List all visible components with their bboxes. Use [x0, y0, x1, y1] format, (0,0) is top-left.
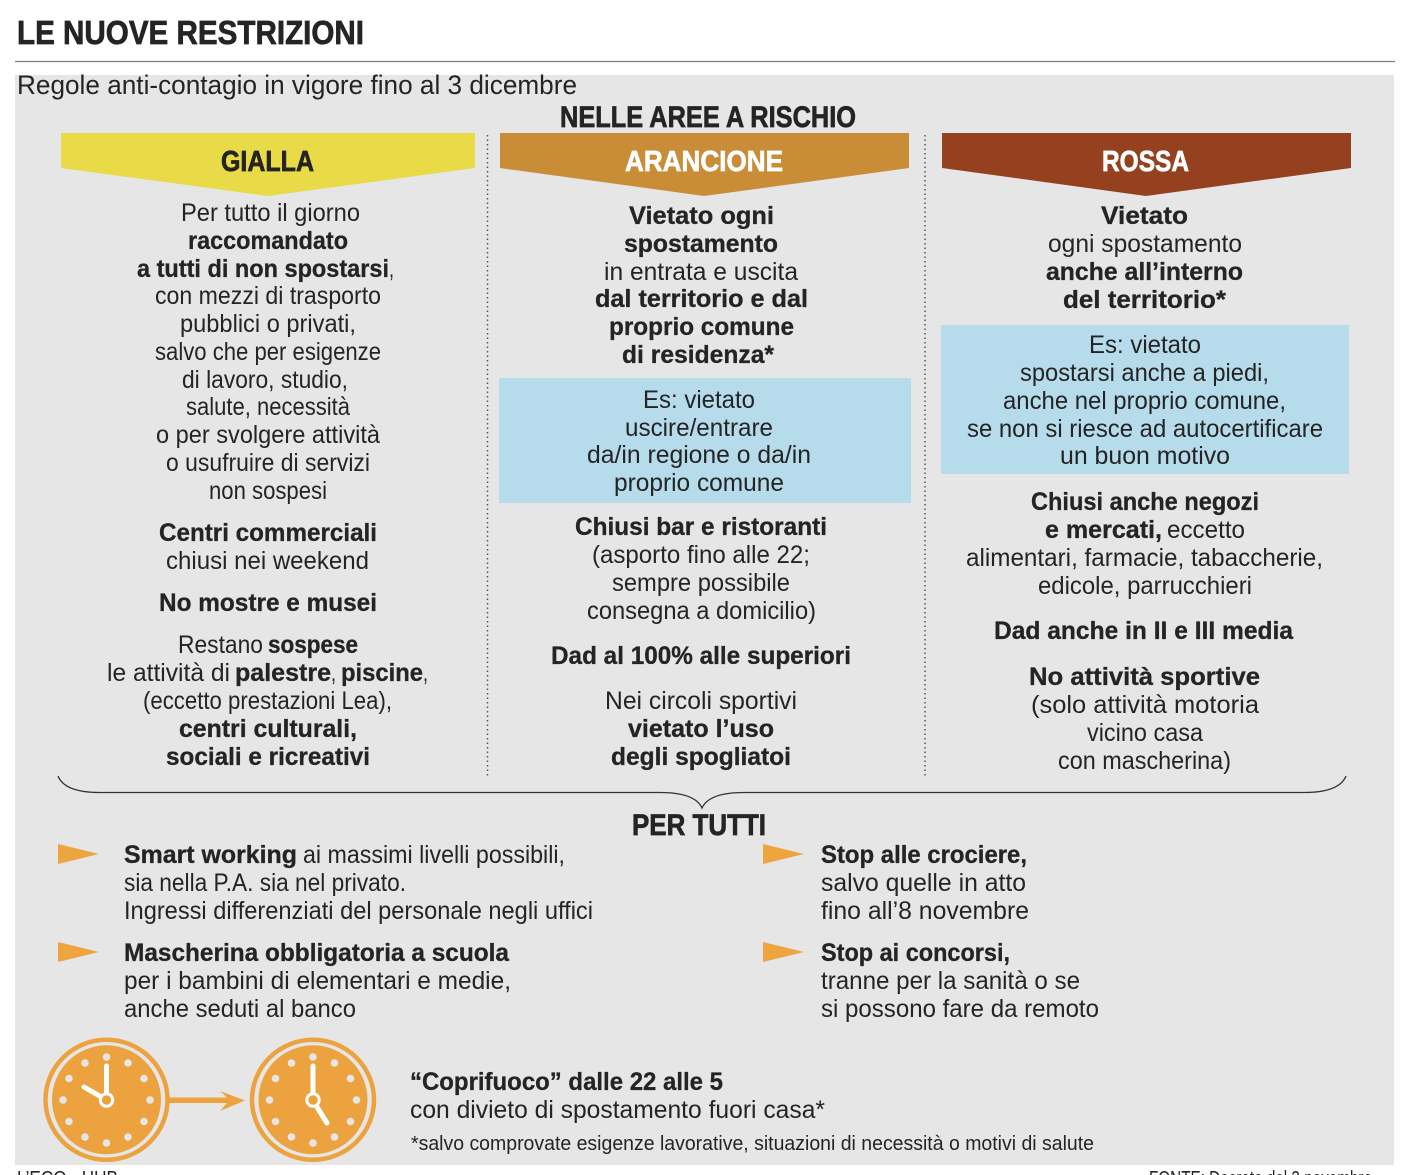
text block: chiusi bar e ristoranti: consegna a domicilio) — [587, 597, 816, 625]
text block: centri commerciali: chiusi nei weekend — [166, 547, 369, 575]
icon: clock 5 — [252, 1040, 374, 1160]
text block: chiusi negozi: edicole, parrucchieri — [1038, 572, 1252, 600]
icon: arrow mascherina — [58, 942, 99, 962]
banner: rossa: ROSSA — [1102, 146, 1189, 178]
icon: arrow smart working — [58, 844, 99, 864]
footnote: *salvo comprovate esigenze lavorative, situazioni di necessità o motivi di salute — [411, 1133, 1094, 1155]
text block: vietato ogni spostamento: proprio comune — [609, 313, 794, 341]
text block: no attività sportive: No attività sportive — [1029, 663, 1260, 691]
text block: smart working: Ingressi differenziati del personale negli uffici — [124, 897, 593, 925]
text block: per tutto il giorno: salvo che per esigenze — [155, 338, 381, 366]
banner: arancione — [500, 133, 909, 196]
subtitle: Regole anti-contagio in vigore fino al 3 dicembre — [17, 70, 577, 100]
text block: smart working: ai massimi livelli possibili, — [303, 841, 565, 869]
text block: attività sospese: , — [423, 659, 428, 687]
text block: vietato ogni spostamento: in entrata e uscita — [604, 258, 798, 286]
text block: chiusi bar e ristoranti: (asporto fino alle 22; — [592, 541, 810, 569]
text block: smart working: Smart working — [124, 841, 297, 869]
text block: per tutto il giorno: pubblici o privati, — [180, 310, 356, 338]
text block: vietato ogni spostamento: Vietato ogni — [629, 202, 774, 230]
text block: per tutto il giorno: Per tutto il giorno — [181, 199, 360, 227]
text block: crociere: Stop alle crociere, — [821, 841, 1027, 869]
text block: coprifuoco: “Coprifuoco” dalle 22 alle 5 — [410, 1068, 723, 1096]
icon: clock 22 — [46, 1040, 168, 1160]
text block: smart working — [124, 841, 593, 925]
text block: coprifuoco — [410, 1068, 825, 1124]
callout: esempio arancione: da/in regione o da/in — [587, 441, 811, 469]
text block: concorsi — [821, 939, 1099, 1023]
text block: no attività sportive — [1029, 663, 1260, 775]
text block: per tutto il giorno: , — [389, 255, 394, 283]
callout: esempio rossa: un buon motivo — [1060, 442, 1230, 470]
icon: arrow crociere — [763, 844, 804, 864]
text block: concorsi: si possono fare da remoto — [821, 995, 1099, 1023]
text block: vietato ogni spostamento: spostamento — [624, 230, 778, 258]
text block: chiusi negozi: alimentari, farmacie, tabaccherie, — [966, 544, 1323, 572]
callout: esempio arancione — [499, 378, 911, 503]
callout: esempio rossa: spostarsi anche a piedi, — [1020, 359, 1269, 387]
text block: attività sospese: centri culturali, — [179, 715, 357, 743]
text block: per tutto il giorno: non sospesi — [209, 477, 327, 505]
banner: rossa — [942, 133, 1351, 196]
text block: circoli sportivi — [605, 687, 797, 771]
callout: esempio arancione: proprio comune — [614, 469, 784, 497]
text block: mascherina — [124, 939, 511, 1023]
text block: smart working: sia nella P.A. sia nel privato. — [124, 869, 406, 897]
text block: per tutto il giorno: a tutti di non spostarsi — [137, 255, 389, 283]
callout: esempio rossa: se non si riesce ad autocertificare — [967, 415, 1323, 443]
heading: per tutti: PER TUTTI — [632, 809, 766, 842]
text block: dad superiori: Dad al 100% alle superiori — [551, 642, 851, 670]
text block: per tutto il giorno: di lavoro, studio, — [182, 366, 348, 394]
callout: esempio arancione: Es: vietato — [643, 386, 755, 414]
text block: vietato spostamento: ogni spostamento — [1048, 230, 1242, 258]
column: arancione rules — [499, 202, 911, 771]
arrow: between clocks — [169, 1091, 245, 1111]
text block: per tutto il giorno: o usufruire di servizi — [166, 449, 370, 477]
text block: per tutto il giorno: salute, necessità — [186, 393, 350, 421]
text block: dad media: Dad anche in II e III media — [994, 617, 1294, 645]
text block: chiusi negozi: e mercati, — [1045, 516, 1162, 544]
text block: vietato spostamento — [1046, 202, 1243, 314]
title: LE NUOVE RESTRIZIONI — [17, 14, 364, 51]
text block: chiusi negozi — [966, 488, 1323, 600]
text block: attività sospese: sospese — [268, 631, 358, 659]
text block: concorsi: tranne per la sanità o se — [821, 967, 1080, 995]
text block: no attività sportive: con mascherina) — [1058, 747, 1231, 775]
text block: per tutto il giorno: o per svolgere attività — [156, 421, 380, 449]
callout: esempio rossa: anche nel proprio comune, — [1003, 387, 1286, 415]
text block: concorsi: Stop ai concorsi, — [821, 939, 1010, 967]
text block: per tutto il giorno: con mezzi di trasporto — [155, 282, 381, 310]
text block: circoli sportivi: Nei circoli sportivi — [605, 687, 797, 715]
text block: chiusi bar e ristoranti: Chiusi bar e ristoranti — [575, 513, 827, 541]
text block: attività sospese: Restano — [178, 631, 263, 659]
callout: esempio rossa: Es: vietato — [1089, 331, 1201, 359]
text block: no attività sportive: (solo attività motoria — [1031, 691, 1259, 719]
text block: circoli sportivi: vietato l’uso — [628, 715, 774, 743]
text block: attività sospese: sociali e ricreativi — [166, 743, 370, 771]
text block: attività sospese: , — [331, 659, 336, 687]
text block: crociere — [821, 841, 1029, 925]
text block: per tutto il giorno — [137, 199, 394, 505]
callout: esempio arancione: uscire/entrare — [625, 414, 773, 442]
text block: attività sospese: piscine — [341, 659, 423, 687]
text block: mascherina: per i bambini di elementari e medie, — [124, 967, 511, 995]
text block: no mostre e musei: No mostre e musei — [159, 589, 377, 617]
banner: arancione: ARANCIONE — [625, 146, 783, 178]
column: rossa rules — [941, 202, 1349, 775]
text block: attività sospese: (eccetto prestazioni Lea), — [143, 687, 392, 715]
text block: crociere: fino all’8 novembre — [821, 897, 1029, 925]
text block: chiusi negozi: eccetto — [1167, 516, 1245, 544]
text block: chiusi negozi: Chiusi anche negozi — [1031, 488, 1259, 516]
text block: vietato spostamento: Vietato — [1101, 202, 1188, 230]
text block: vietato ogni spostamento: dal territorio e dal — [595, 285, 808, 313]
text block: chiusi bar e ristoranti: sempre possibile — [612, 569, 790, 597]
text block: attività sospese: le attività di — [107, 659, 230, 687]
text block: attività sospese — [107, 631, 428, 771]
callout: esempio rossa — [941, 325, 1349, 474]
text block: mascherina: Mascherina obbligatoria a scuola — [124, 939, 510, 967]
text block: per tutto il giorno: raccomandato — [188, 227, 348, 255]
text block: attività sospese: palestre — [235, 659, 331, 687]
text block: centri commerciali — [159, 519, 377, 575]
text block: centri commerciali: Centri commerciali — [159, 519, 377, 547]
text block: vietato spostamento: anche all’interno — [1046, 258, 1243, 286]
text block: mascherina: anche seduti al banco — [124, 995, 356, 1023]
column: gialla rules — [107, 199, 428, 771]
text block: chiusi bar e ristoranti — [575, 513, 827, 625]
text block: vietato ogni spostamento: di residenza* — [622, 341, 774, 369]
text block: coprifuoco: con divieto di spostamento fuori casa* — [410, 1096, 825, 1124]
banner: gialla: GIALLA — [221, 146, 314, 178]
icon: arrow concorsi — [763, 942, 804, 962]
banner: gialla — [61, 133, 475, 196]
brace — [58, 776, 1346, 808]
text block: vietato ogni spostamento — [595, 202, 808, 369]
text block: no attività sportive: vicino casa — [1087, 719, 1203, 747]
text block: crociere: salvo quelle in atto — [821, 869, 1026, 897]
text block: circoli sportivi: degli spogliatoi — [611, 743, 791, 771]
text block: vietato spostamento: del territorio* — [1063, 286, 1226, 314]
heading: aree a rischio: NELLE AREE A RISCHIO — [560, 101, 856, 134]
